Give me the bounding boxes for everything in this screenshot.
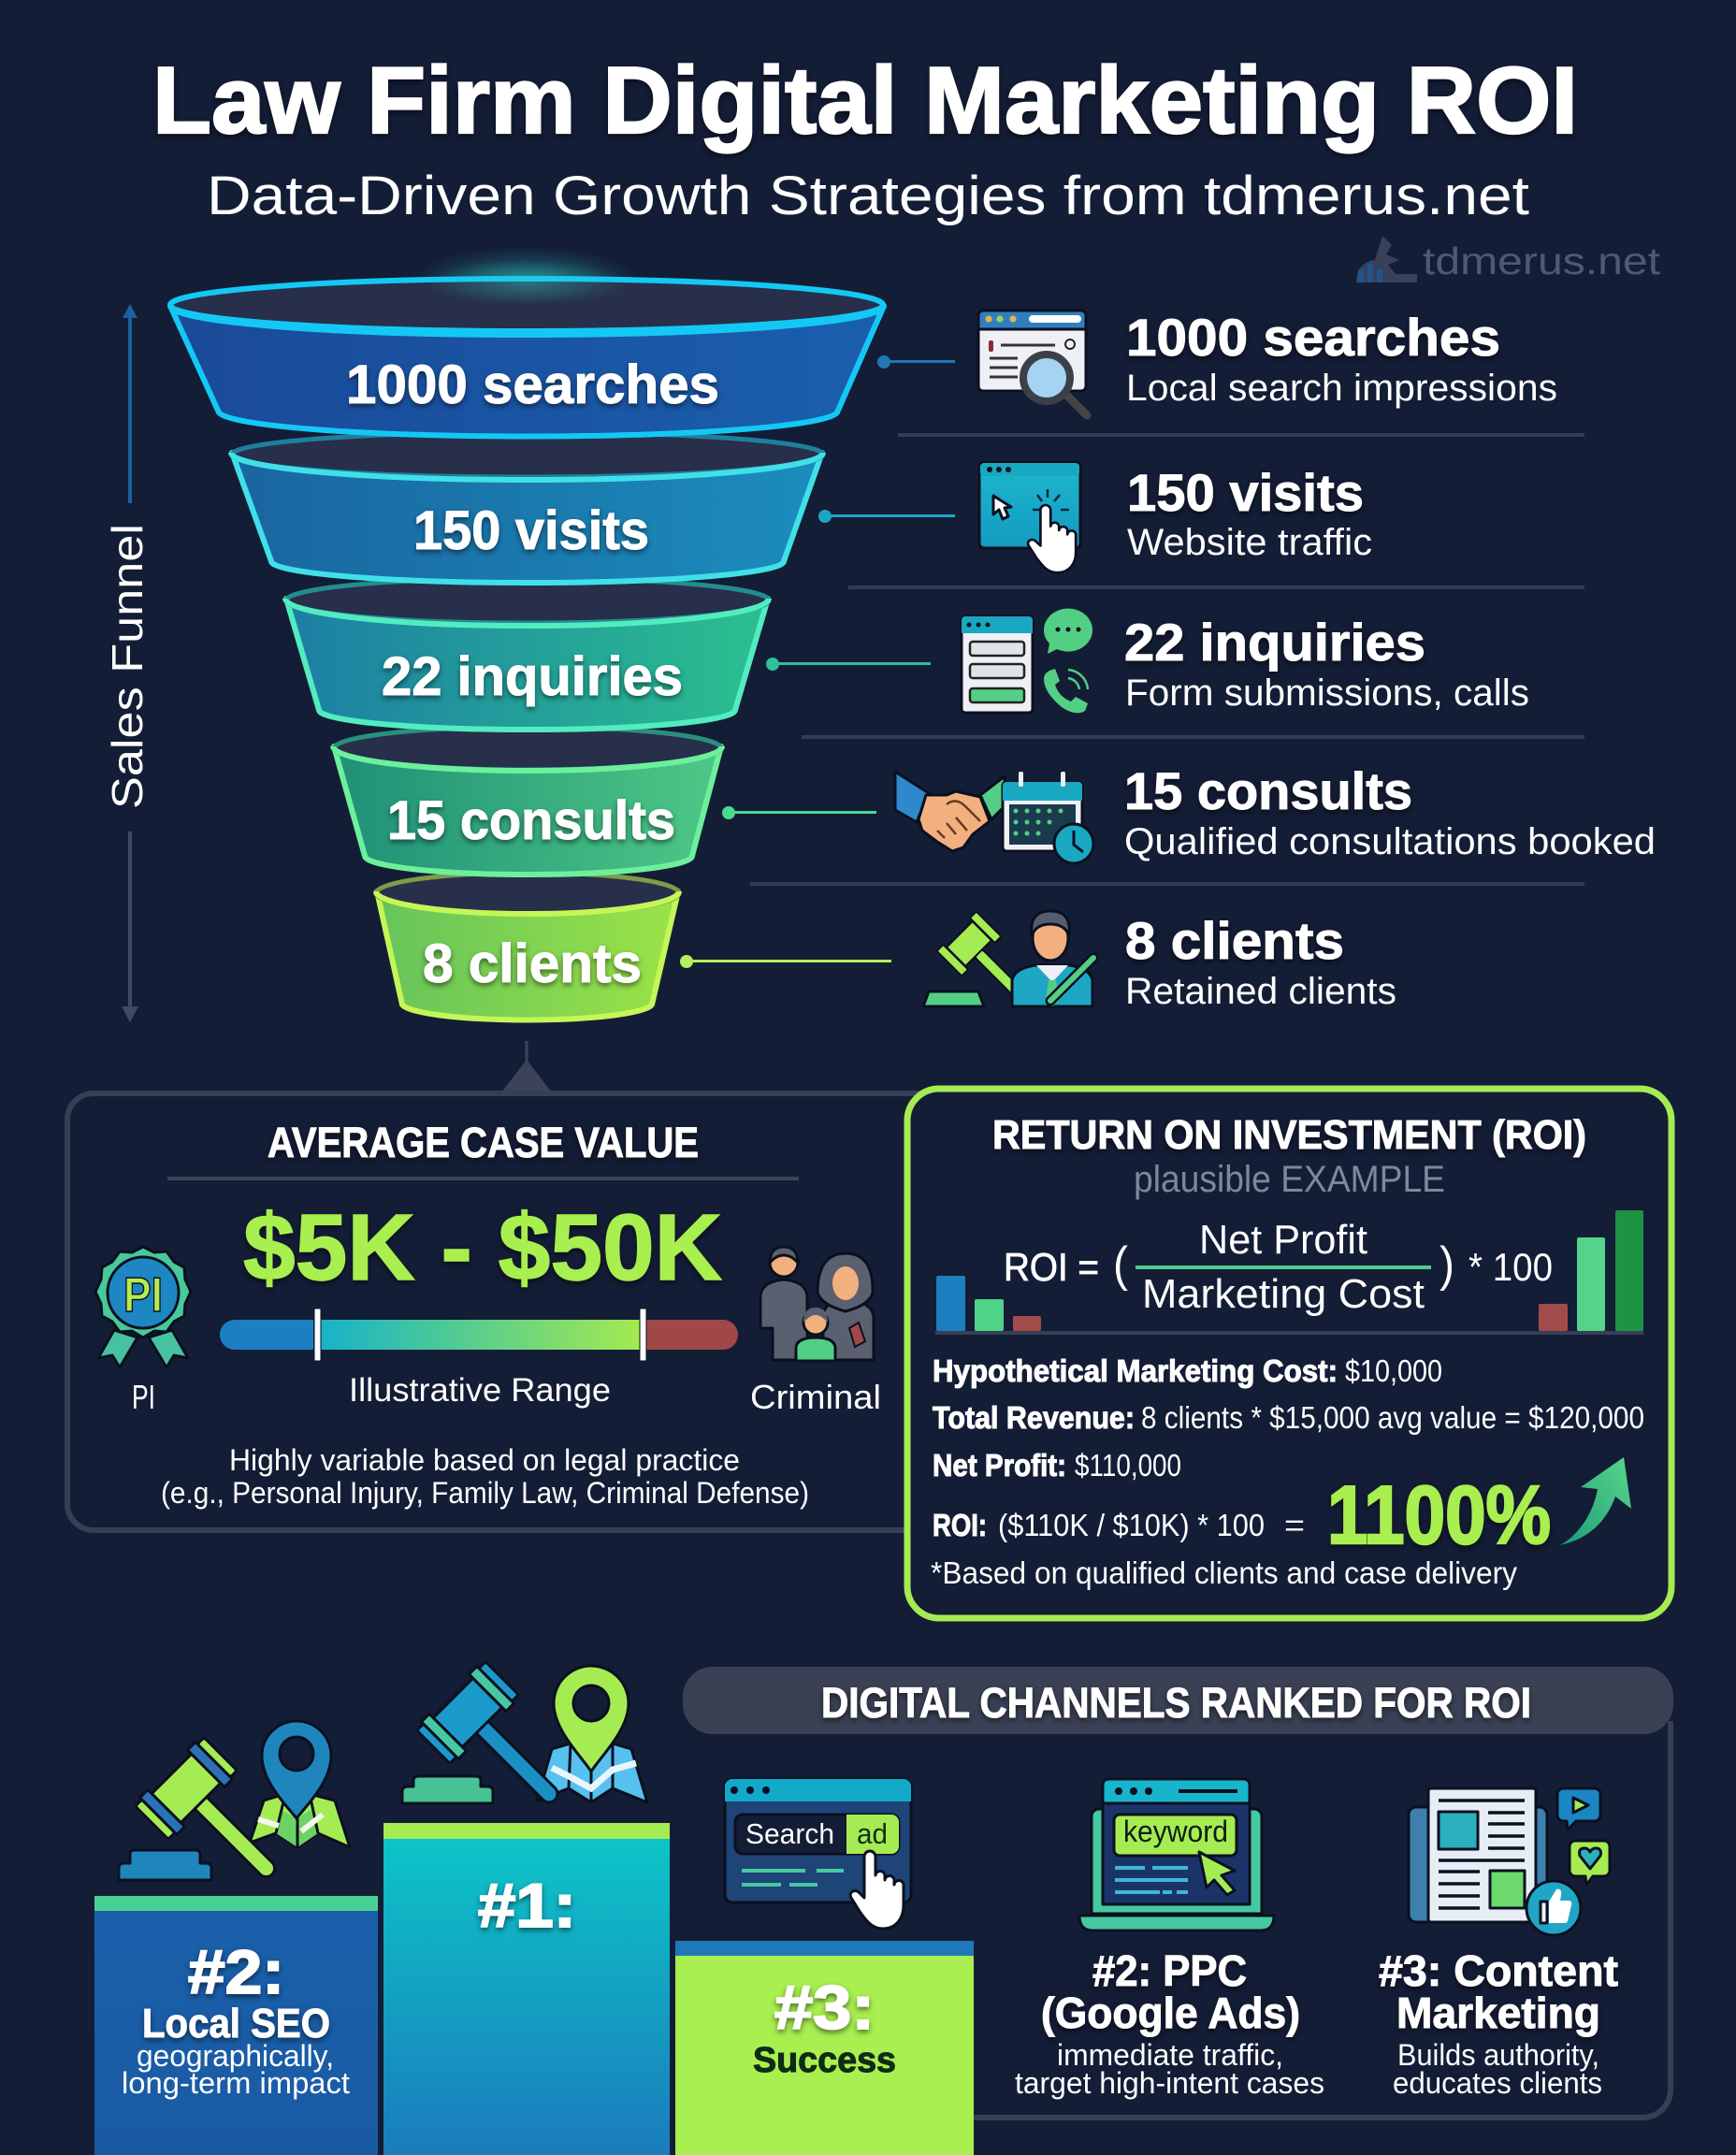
label: PI: PI <box>132 1378 155 1416</box>
icon: search browser <box>978 311 1087 415</box>
title: Law Firm Digital Marketing ROI <box>152 49 1578 153</box>
icon: keyword laptop: keyword <box>1123 1815 1228 1848</box>
connector lines <box>680 355 955 968</box>
calculation lines: $110,000 <box>1075 1448 1181 1482</box>
calculation lines: $10,000 <box>1345 1353 1442 1388</box>
podium: #2 Local SEO: long-term impact <box>122 2066 350 2100</box>
icon: handshake and calendar <box>895 772 1093 863</box>
heading: ROI: RETURN ON INVESTMENT (ROI) <box>992 1112 1586 1158</box>
formula: ) <box>1439 1237 1454 1292</box>
range bar <box>220 1309 738 1361</box>
icon: click browser <box>979 462 1080 572</box>
text: 22 inquiries: Form submissions, calls <box>1125 673 1529 714</box>
text: 15 consults: Qualified consultations booked <box>1124 821 1656 862</box>
subheading: plausible example: plausible EXAMPLE <box>1134 1159 1445 1200</box>
text: 15 consults: 15 consults <box>1124 761 1412 820</box>
text: 1000 searches: Local search impressions <box>1126 368 1557 409</box>
formula: Marketing Cost <box>1142 1271 1425 1317</box>
subtitle: Data-Driven Growth Strategies from tdmerus.net <box>207 166 1529 226</box>
panel: average case value <box>67 1041 926 1530</box>
podium: #1: #1: <box>478 1871 576 1940</box>
calculation lines: ($110K / $10K) * 100 <box>998 1508 1265 1542</box>
text: 1000 searches: 1000 searches <box>1126 308 1500 367</box>
footnote: *Based on qualified clients and case delivery <box>931 1555 1517 1590</box>
value range: $5K - $50K <box>243 1195 722 1300</box>
icon: search ad: ad <box>857 1817 888 1850</box>
funnel stage: 22 inquiries <box>285 578 769 730</box>
icon: PI badge <box>95 1247 191 1367</box>
icon: form, chat and phone <box>962 609 1092 713</box>
icon: gavel and attorney <box>923 911 1093 1022</box>
funnel stage: 8 clients <box>376 873 679 1020</box>
panel: digital channels <box>683 1667 1673 2118</box>
text: 15 consults <box>1124 761 1656 862</box>
calculation lines: Hypothetical Marketing Cost: <box>933 1353 1338 1388</box>
value: 1100%: 1100% <box>1327 1468 1551 1561</box>
arrow: growth <box>1560 1457 1631 1545</box>
formula <box>1004 1217 1553 1317</box>
text: 150 visits: 150 visits <box>1127 463 1364 522</box>
funnel stage: 1000 searches: 1000 searches <box>346 354 719 415</box>
note: highly variable <box>161 1443 809 1510</box>
funnel top glow <box>414 247 639 311</box>
text: 1000 searches <box>1126 308 1557 409</box>
calculation lines: = <box>1284 1508 1305 1542</box>
podium: #2 Local SEO: #2: <box>188 1937 284 2006</box>
text: 8 clients <box>1125 911 1396 1012</box>
text: 8 clients: Retained clients <box>1125 971 1396 1012</box>
dividers <box>750 433 1584 886</box>
funnel stage: 15 consults: 15 consults <box>387 790 675 851</box>
funnel stage: 22 inquiries: 22 inquiries <box>382 646 683 707</box>
podium: #2 Local SEO <box>94 1896 378 2155</box>
podium: #3 Success: Success <box>753 2041 896 2080</box>
text: 22 inquiries <box>1124 613 1529 714</box>
icon: gavel and map, blue pin <box>119 1721 350 1909</box>
heading: average case value: AVERAGE CASE VALUE <box>268 1119 699 1166</box>
bar charts <box>935 1210 1643 1335</box>
sales funnel axis: Sales Funnel <box>103 524 152 809</box>
text: #3 Content Marketing: Marketing <box>1396 1989 1600 2037</box>
text: #2 PPC: immediate traffic, <box>1057 2038 1283 2072</box>
funnel stage: 150 visits: 150 visits <box>413 500 649 561</box>
text: #2 PPC: (Google Ads) <box>1041 1989 1300 2037</box>
icon: gavel and map, green pin <box>402 1659 647 1834</box>
text: #3 Content Marketing <box>1379 1946 1618 2100</box>
calculation lines <box>933 1353 1644 1542</box>
icon: content article <box>1409 1788 1610 1935</box>
icon: search ad <box>725 1779 911 1929</box>
icon: criminal group <box>760 1247 874 1361</box>
podium: #2 Local SEO: geographically, <box>137 2039 334 2073</box>
label: criminal: Criminal <box>750 1378 881 1416</box>
formula: * 100 <box>1468 1245 1553 1289</box>
text: #2 PPC <box>1015 1946 1324 2100</box>
text: 150 visits: Website traffic <box>1127 522 1372 563</box>
icon: search ad: Search <box>745 1817 834 1850</box>
calculation lines: Total Revenue: <box>933 1400 1135 1435</box>
formula: ( <box>1113 1237 1129 1292</box>
text: #3 Content Marketing: #3: Content <box>1379 1946 1618 1995</box>
sales funnel axis <box>103 304 152 1022</box>
funnel stage: 8 clients: 8 clients <box>423 933 642 994</box>
text: 150 visits <box>1127 463 1372 563</box>
heading: channels ranked: DIGITAL CHANNELS RANKED FOR ROI <box>821 1679 1531 1727</box>
calculation lines: 8 clients * $15,000 avg value = $120,000 <box>1141 1400 1644 1435</box>
text: #2 PPC: target high-intent cases <box>1015 2066 1324 2100</box>
funnel: 5 stages <box>170 260 884 1020</box>
icon: PI badge: PI <box>123 1268 163 1323</box>
text: 8 clients: 8 clients <box>1125 911 1344 970</box>
podium: #2 Local SEO: Local SEO <box>142 2001 330 2047</box>
funnel stage: 15 consults <box>333 727 722 875</box>
calculation lines: Net Profit: <box>933 1448 1066 1482</box>
watermark: tdmerus.net <box>1356 236 1661 282</box>
podium: #3 Success <box>675 1941 974 2155</box>
funnel stage: 1000 searches <box>170 260 884 437</box>
calculation lines: ROI: <box>933 1508 987 1542</box>
icon: keyword laptop <box>1079 1779 1274 1931</box>
note: highly variable: (e.g., Personal Injury, Family Law, Criminal Defense) <box>161 1476 809 1510</box>
text: #3 Content Marketing: Builds authority, <box>1397 2038 1599 2072</box>
watermark: tdmerus.net: tdmerus.net <box>1423 239 1661 282</box>
text: #3 Content Marketing: educates clients <box>1393 2066 1602 2100</box>
formula: ROI = <box>1004 1245 1099 1289</box>
podium: #1 <box>383 1823 670 2155</box>
note: highly variable: Highly variable based on legal practice <box>229 1443 740 1477</box>
funnel stage: 150 visits <box>231 432 823 583</box>
formula: Net Profit <box>1199 1217 1367 1263</box>
text: #2 PPC: #2: PPC <box>1092 1946 1247 1995</box>
label: illustrative range: Illustrative Range <box>349 1372 611 1409</box>
panel: return on investment <box>907 1089 1671 1618</box>
podium: #3 Success: #3: <box>774 1973 875 2042</box>
text: 22 inquiries: 22 inquiries <box>1124 613 1425 672</box>
